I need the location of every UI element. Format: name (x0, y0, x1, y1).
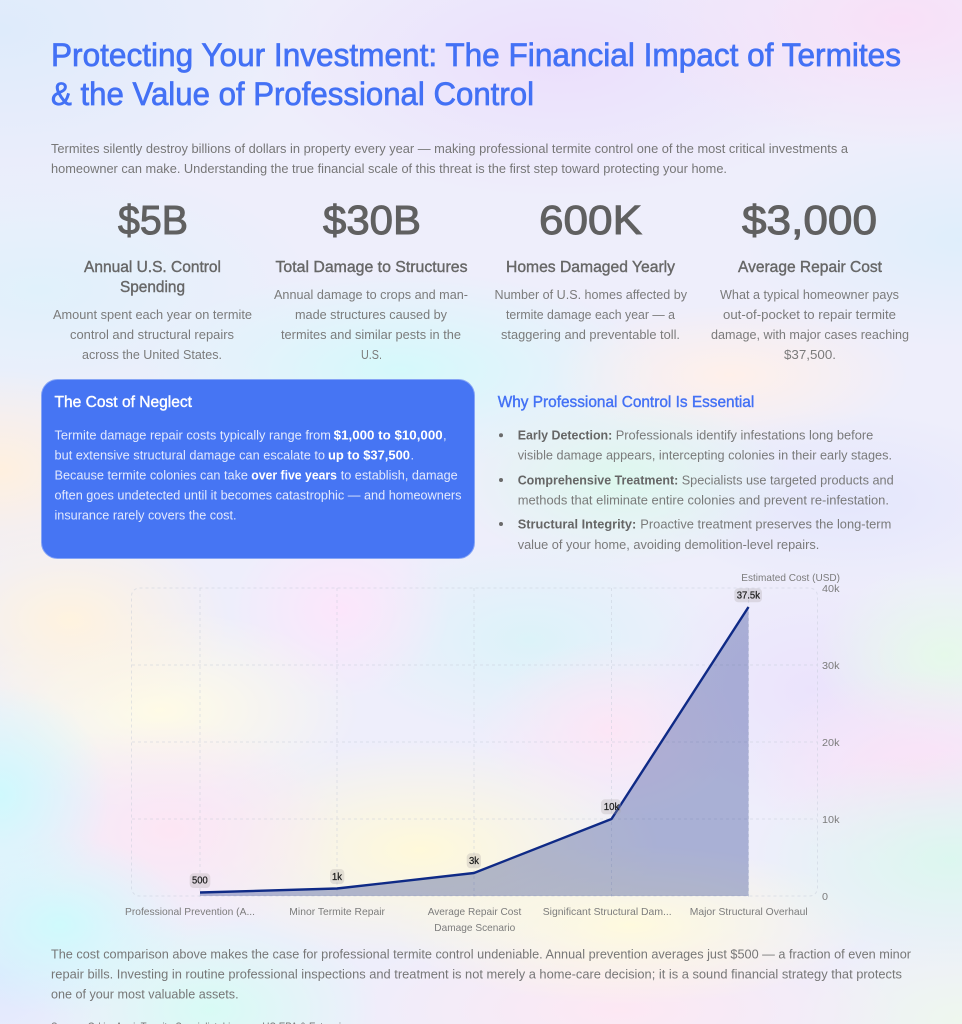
panel: stat average repair cost: $3,000 (742, 197, 877, 243)
value labels: 500 (192, 876, 208, 886)
y axis labels: 0 (822, 891, 828, 903)
area chart: estimated cost by damage scenario (125, 572, 840, 934)
panel: stat total damage: made structures caused by (295, 307, 447, 322)
value labels (190, 588, 762, 888)
bullet: early detection: Early Detection: (518, 427, 612, 442)
panel: stat annual control spending: Spending (120, 279, 185, 296)
panel: stat total damage: U.S. (361, 347, 382, 362)
value labels: 1k (332, 872, 343, 883)
closing paragraph: The cost comparison above makes the case for professional termite control undeniable. Annual prevention averages just $500 — a fraction of even minor (51, 946, 912, 962)
bullet: structural integrity: Structural Integrity: (518, 516, 636, 532)
panel: stat annual control spending: Amount spent each year on termite (53, 307, 252, 322)
panel: stat average repair cost: What a typical homeowner pays (720, 287, 899, 302)
text block: neglect body: Termite damage repair costs typically range from (54, 428, 331, 442)
bullet: comprehensive treatment: methods that eliminate entire colonies and prevent re-infestation. (518, 492, 889, 507)
panel: stat annual control spending: across the United States. (82, 347, 222, 362)
panel: stat homes damaged: 600K (539, 197, 642, 243)
value labels: 3k (469, 856, 480, 867)
closing paragraph (51, 946, 912, 1002)
y axis labels: 30k (822, 660, 840, 672)
panel: the cost of neglect (42, 380, 474, 558)
panel: why professional control is essential (498, 394, 894, 552)
bullet: early detection (499, 427, 892, 462)
panel: stat annual control spending (53, 197, 252, 362)
y axis labels: 10k (822, 814, 840, 826)
bullet: structural integrity: Proactive treatment preserves the long-term (640, 516, 891, 532)
title: Protecting Your Investment: The Financial Impact of Termites (51, 37, 901, 73)
panel: stat homes damaged: Number of U.S. homes affected by (494, 287, 687, 302)
panel: stat total damage: $30B (323, 197, 421, 243)
y axis labels (741, 572, 840, 903)
y axis labels: Estimated Cost (USD) (741, 572, 840, 584)
text block: neglect body: , (443, 428, 447, 442)
text block: neglect body: . (410, 448, 414, 462)
panel: stat homes damaged: staggering and preventable toll. (501, 327, 680, 342)
heading: why professional control: Why Professional Control Is Essential (498, 394, 754, 411)
text block: neglect body: but extensive structural damage can escalate to (54, 448, 325, 462)
panel: stat annual control spending: control and structural repairs (70, 327, 234, 342)
panel: stat total damage: Annual damage to crops and man- (274, 287, 468, 302)
intro paragraph: Termites silently destroy billions of dollars in property every year — making professional termite control one of the most critical investments a (51, 141, 849, 156)
bullet: structural integrity: value of your home, avoiding demolition-level repairs. (518, 537, 819, 552)
bullet: comprehensive treatment: Specialists use targeted products and (682, 472, 894, 487)
value labels: 10k (604, 802, 620, 813)
heading: the cost of neglect: The Cost of Neglect (54, 394, 193, 411)
panel: stat annual control spending: Annual U.S. Control (84, 259, 221, 276)
panel: stat average repair cost: damage, with major cases reaching (711, 327, 909, 342)
closing paragraph: one of your most valuable assets. (51, 986, 239, 1002)
bullet: early detection: visible damage appears, intercepting colonies in their early stages. (518, 447, 892, 462)
panel: stat average repair cost: out-of-pocket to repair termite (723, 307, 896, 322)
x axis labels: Major Structural Overhaul (690, 906, 808, 918)
panel: stat average repair cost: Average Repair Cost (738, 259, 883, 276)
bullet: structural integrity (499, 516, 891, 552)
text block: neglect body: often goes undetected until it becomes catastrophic — and homeowners (54, 488, 462, 502)
bullet: comprehensive treatment: Comprehensive Treatment: (518, 472, 678, 487)
chart area fill (200, 607, 748, 896)
text block: neglect body: over five years (251, 468, 337, 482)
panel: stat homes damaged: Homes Damaged Yearly (506, 259, 675, 276)
panel: stat total damage: termites and similar pests in the (281, 327, 461, 342)
panel: stat total damage: Total Damage to Structures (276, 259, 468, 276)
text block: neglect body: Because termite colonies can take (54, 468, 248, 482)
x axis labels: Professional Prevention (A... (125, 906, 255, 918)
text block: neglect body: insurance rarely covers the cost. (54, 508, 236, 522)
y axis labels: 20k (822, 737, 840, 749)
bullet: early detection: Professionals identify infestations long before (616, 427, 873, 442)
panel: stat total damage (274, 197, 468, 362)
x axis labels (125, 906, 808, 934)
panel: stat annual control spending: $5B (118, 197, 188, 243)
x axis labels: Average Repair Cost (428, 906, 521, 918)
panel: stat average repair cost: $37,500. (784, 347, 836, 362)
title (51, 37, 901, 112)
panel: stat homes damaged: termite damage each year — a (506, 307, 676, 322)
value labels: 37.5k (737, 590, 761, 602)
x axis labels: Damage Scenario (434, 922, 515, 934)
text block: neglect body (54, 428, 462, 522)
bullet: comprehensive treatment (499, 472, 894, 507)
y axis labels: 40k (822, 583, 840, 595)
text block: neglect body: $1,000 to $10,000 (334, 428, 443, 442)
closing paragraph: repair bills. Investing in routine professional inspections and treatment is not merely a home-care decision; it is a sound financial strategy that protects (51, 966, 902, 982)
intro paragraph: homeowner can make. Understanding the true financial scale of this threat is the first step toward protecting your home. (51, 161, 727, 176)
x axis labels: Minor Termite Repair (289, 906, 385, 918)
panel: stat average repair cost (711, 197, 909, 362)
panel: stat homes damaged (494, 197, 687, 342)
chart line (200, 607, 748, 892)
text block: neglect body: up to $37,500 (328, 448, 410, 462)
text block: neglect body: to establish, damage (341, 468, 458, 482)
x axis labels: Significant Structural Dam... (543, 906, 672, 918)
intro paragraph (51, 141, 849, 176)
title: & the Value of Professional Control (51, 76, 534, 112)
